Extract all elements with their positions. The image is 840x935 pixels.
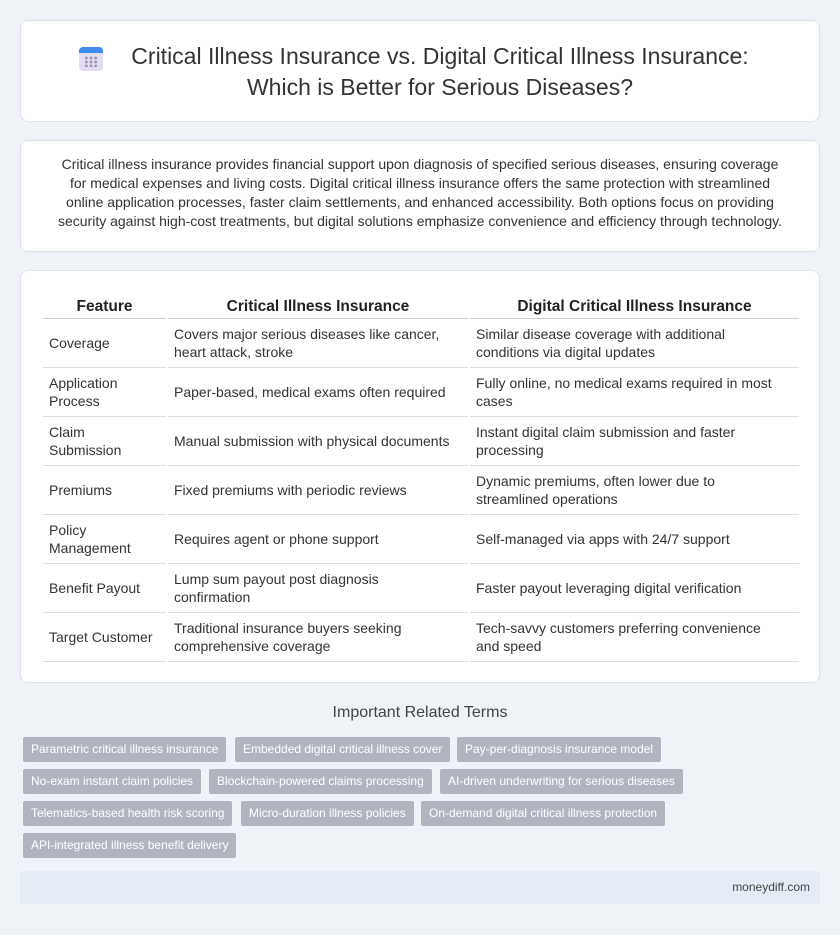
comparison table: Self-managed via apps with 24/7 support [476, 531, 730, 547]
related terms heading: Important Related Terms [333, 704, 507, 721]
related terms tags: Embedded digital critical illness cover [243, 742, 442, 756]
related terms tags: Blockchain-powered claims processing [217, 774, 424, 788]
comparison table: Manual submission with physical documents [174, 433, 449, 449]
comparison table: Tech-savvy customers preferring convenience and speed [476, 620, 761, 654]
title [131, 43, 749, 100]
comparison table: Digital Critical Illness Insurance [517, 298, 752, 314]
comparison table: Benefit Payout [49, 580, 140, 596]
related terms tags: Pay-per-diagnosis insurance model [465, 742, 653, 756]
intro card [20, 140, 820, 252]
comparison table: Covers major serious diseases like cancer, heart attack, stroke [174, 326, 439, 360]
comparison table: Policy Management [49, 522, 131, 556]
table card [20, 270, 820, 683]
related terms tags: Micro-duration illness policies [249, 806, 406, 820]
comparison table: Similar disease coverage with additional conditions via digital updates [476, 326, 725, 360]
related terms tags: AI-driven underwriting for serious diseases [448, 774, 675, 788]
related terms tags: No-exam instant claim policies [31, 774, 193, 788]
comparison table: Premiums [49, 482, 112, 498]
comparison table: Requires agent or phone support [174, 531, 379, 547]
comparison table: Target Customer [49, 629, 152, 645]
comparison table: Dynamic premiums, often lower due to streamlined operations [476, 473, 715, 507]
related terms tags: Telematics-based health risk scoring [31, 806, 224, 820]
comparison table: Traditional insurance buyers seeking comprehensive coverage [174, 620, 402, 654]
intro text: security against high-cost treatments, but digital solutions emphasize convenience and efficiency through technology. [58, 213, 782, 229]
comparison table: Fixed premiums with periodic reviews [174, 482, 407, 498]
intro text [58, 156, 782, 229]
comparison table: Feature [76, 298, 132, 314]
footer [20, 871, 820, 904]
comparison table: Claim Submission [49, 424, 121, 458]
comparison table [43, 298, 799, 662]
related terms tags: API-integrated illness benefit delivery [31, 838, 228, 852]
header card [20, 20, 820, 122]
related terms tags: On-demand digital critical illness protection [429, 806, 657, 820]
title: Critical Illness Insurance vs. Digital Critical Illness Insurance: [131, 43, 749, 69]
icon: calendar [79, 47, 103, 71]
intro text: for medical expenses and living costs. Digital critical illness insurance offers the same protection with streamlined [70, 175, 770, 191]
comparison table: Instant digital claim submission and faster processing [476, 424, 735, 458]
footer: moneydiff.com [732, 880, 810, 894]
intro text: online application processes, faster claim settlements, and enhanced accessibility. Both options focus on providing [66, 194, 774, 210]
comparison table: Application Process [49, 375, 118, 409]
comparison table: Coverage [49, 335, 110, 351]
comparison table: Lump sum payout post diagnosis confirmation [174, 571, 379, 605]
comparison table: Critical Illness Insurance [227, 298, 409, 314]
comparison table: Faster payout leveraging digital verification [476, 580, 741, 596]
related terms tags: Parametric critical illness insurance [31, 742, 218, 756]
comparison table: Paper-based, medical exams often required [174, 384, 446, 400]
intro text: Critical illness insurance provides financial support upon diagnosis of specified serious diseases, ensuring coverage [62, 156, 778, 172]
comparison table: Fully online, no medical exams required in most cases [476, 375, 772, 409]
title: Which is Better for Serious Diseases? [247, 74, 633, 100]
